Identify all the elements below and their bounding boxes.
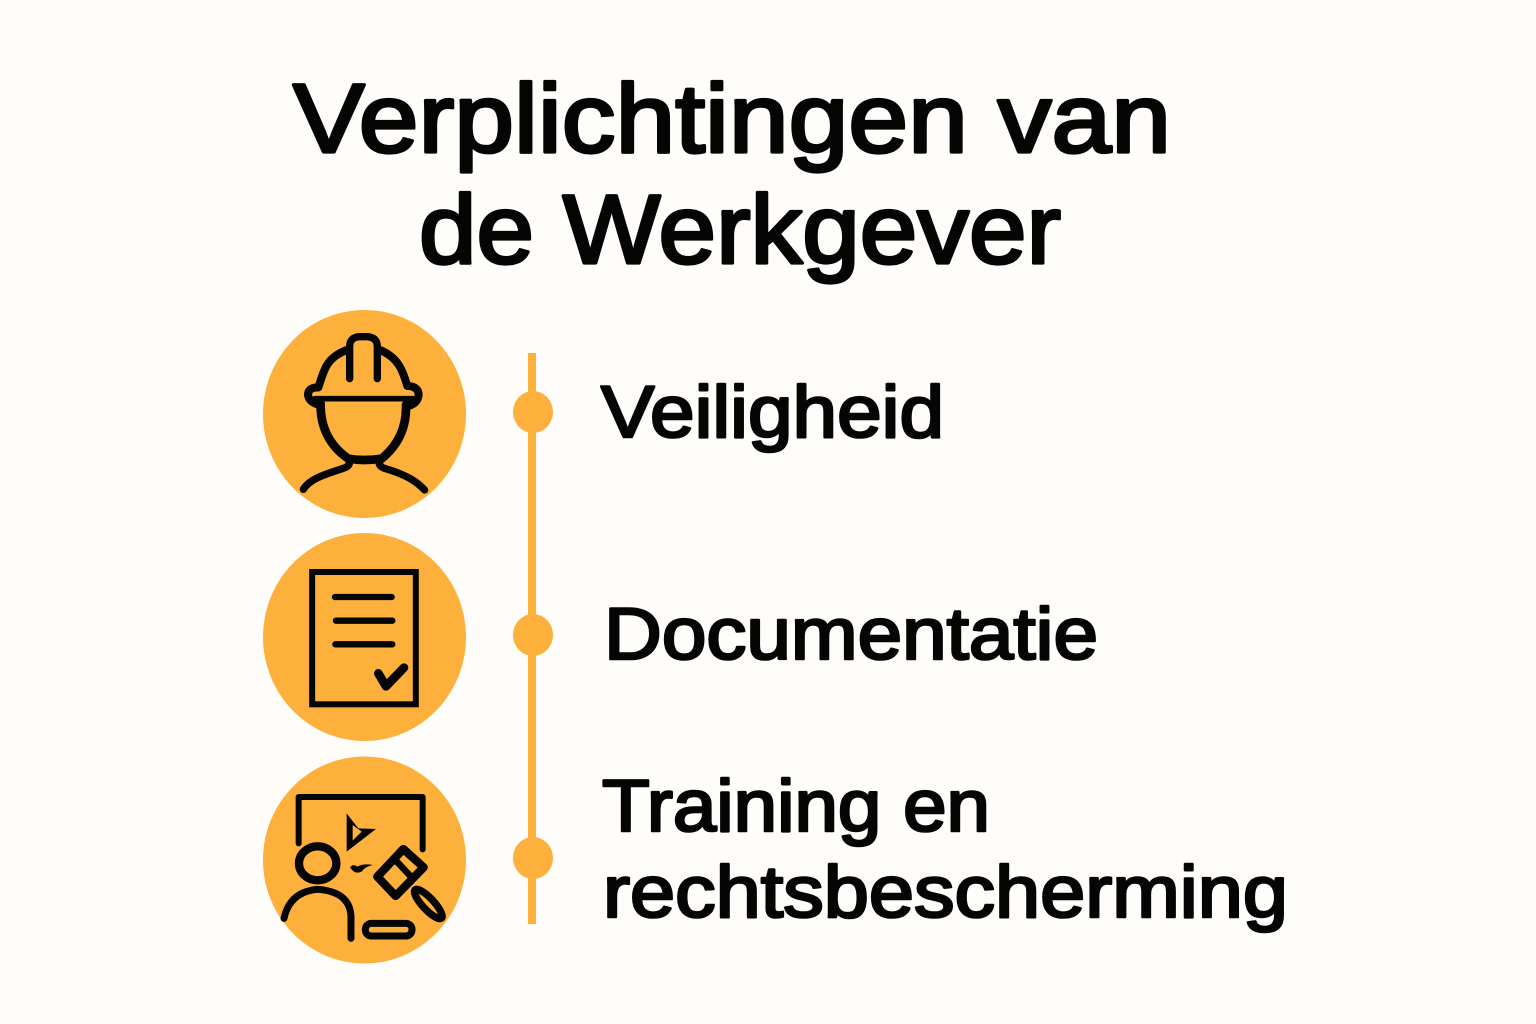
label: Training en rechtsbescherming: Training en xyxy=(602,766,990,847)
icon: training and legal gavel xyxy=(263,756,466,964)
title xyxy=(293,64,1171,284)
label: Veiligheid: Veiligheid xyxy=(601,372,944,453)
timeline xyxy=(513,353,553,924)
label: Documentatie: Documentatie xyxy=(604,594,1098,675)
icon: construction worker xyxy=(263,310,466,518)
icon: document with check xyxy=(263,533,466,741)
title: de Werkgever xyxy=(419,175,1061,284)
title: Verplichtingen van xyxy=(293,64,1171,173)
label: Training en rechtsbescherming xyxy=(602,766,1288,933)
label: Training en rechtsbescherming: rechtsbescherming xyxy=(603,852,1288,933)
